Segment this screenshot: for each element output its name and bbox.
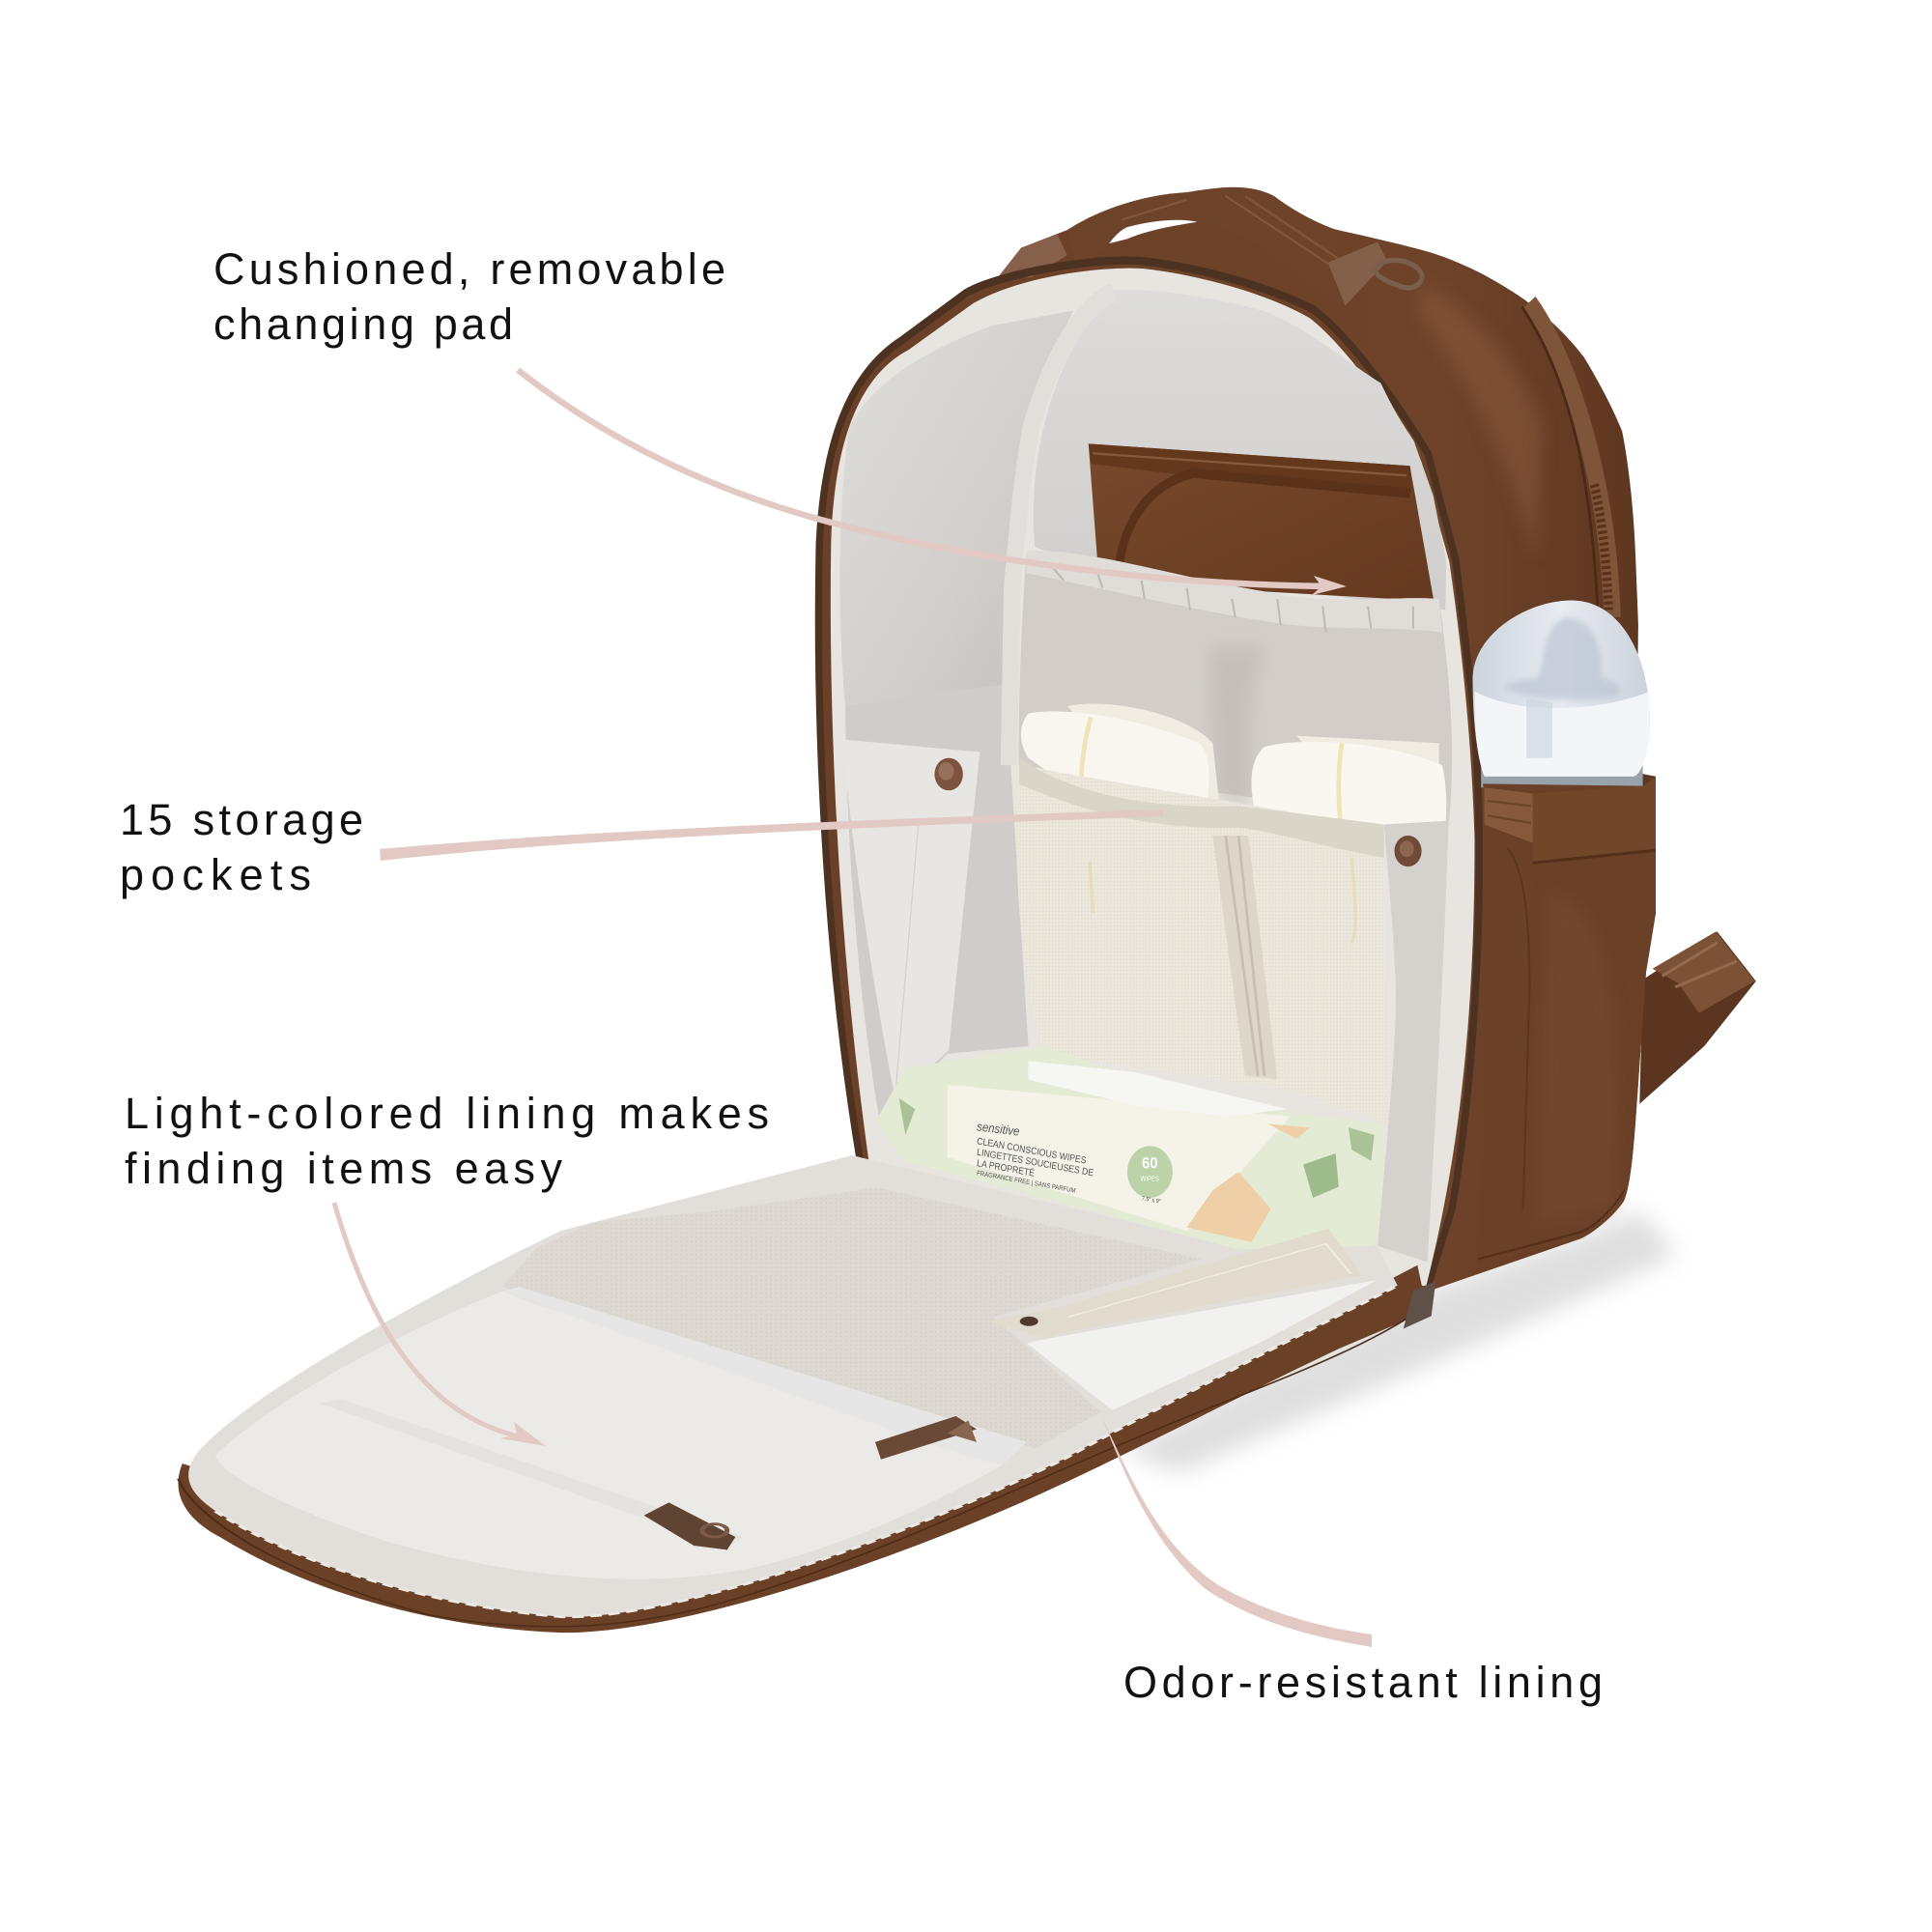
label: odor-resistant: Odor-resistant lining bbox=[1123, 1658, 1603, 1707]
backpack main body bbox=[818, 187, 1756, 1320]
arrow: changing pad bbox=[518, 370, 1347, 595]
arrow: storage pockets bbox=[380, 810, 1163, 861]
label: changing pad bbox=[213, 244, 725, 349]
wipes package: 60 bbox=[1142, 1154, 1158, 1173]
side pocket bbox=[1478, 777, 1656, 1264]
mesh pocket bbox=[1016, 758, 1387, 1123]
wipes package bbox=[876, 1046, 1384, 1250]
zipper trim bbox=[818, 261, 1479, 1313]
label: storage pockets: 15 storage bbox=[120, 795, 363, 844]
arrow: odor-resistant lining bbox=[1101, 1415, 1372, 1647]
lower right zipper slider bbox=[1404, 1281, 1435, 1328]
label: changing pad: Cushioned, removable bbox=[213, 244, 725, 294]
shell highlights bbox=[1420, 285, 1543, 558]
backpack foreground bbox=[876, 601, 1656, 1328]
D-ring buckle bbox=[1328, 242, 1422, 305]
arrow: lining bbox=[334, 1203, 546, 1446]
back wall bbox=[1034, 290, 1446, 611]
velcro strap bbox=[986, 1229, 1363, 1339]
white lining corner bbox=[1027, 1280, 1378, 1410]
flap mesh pocket bbox=[502, 1187, 1201, 1449]
flap inner panel bbox=[215, 1292, 1006, 1579]
shoulder strap bbox=[1639, 931, 1756, 1104]
wipes package: LA PROPRETÉ bbox=[977, 1158, 1036, 1179]
flap lining bbox=[188, 1155, 1398, 1617]
bottle bbox=[1473, 601, 1650, 789]
elastic pocket bbox=[1018, 551, 1452, 824]
scalloped lining edge bbox=[215, 1286, 1398, 1617]
side panel with zipper and mesh back bbox=[1521, 302, 1612, 617]
right snap tab bbox=[1378, 821, 1449, 1263]
flap zipper pockets bbox=[320, 1287, 1027, 1549]
label: storage pockets bbox=[120, 795, 363, 899]
divider seam bbox=[1009, 292, 1114, 765]
label: storage pockets: pockets bbox=[120, 850, 311, 899]
left interior wall bbox=[839, 311, 1073, 706]
label: light lining bbox=[125, 1089, 769, 1193]
wipes package: 7.5" x 9" bbox=[1141, 1196, 1161, 1206]
label: light lining: finding items easy bbox=[125, 1144, 562, 1193]
outer shell bbox=[818, 187, 1656, 1320]
diapers bbox=[1021, 704, 1446, 836]
wipes package: WIPES bbox=[1141, 1176, 1160, 1182]
wipes package: FRAGRANCE FREE | SANS PARFUM bbox=[977, 1170, 1076, 1195]
top handle bbox=[998, 187, 1342, 305]
label: light lining: Light-colored lining makes bbox=[125, 1089, 769, 1138]
label: changing pad: changing pad bbox=[213, 299, 513, 349]
ground shadow bbox=[1121, 1212, 1676, 1473]
left snap tab bbox=[842, 739, 980, 1101]
wipes package: LINGETTES SOUCIEUSES DE bbox=[977, 1147, 1094, 1178]
wipes package: CLEAN CONSCIOUS WIPES bbox=[977, 1136, 1087, 1166]
flap zipper edge bbox=[178, 1265, 1426, 1633]
wipes package: sensitive bbox=[977, 1120, 1020, 1139]
interior lining bbox=[831, 269, 1475, 1287]
changing pad bbox=[1089, 443, 1434, 601]
open front flap bbox=[178, 1155, 1426, 1633]
